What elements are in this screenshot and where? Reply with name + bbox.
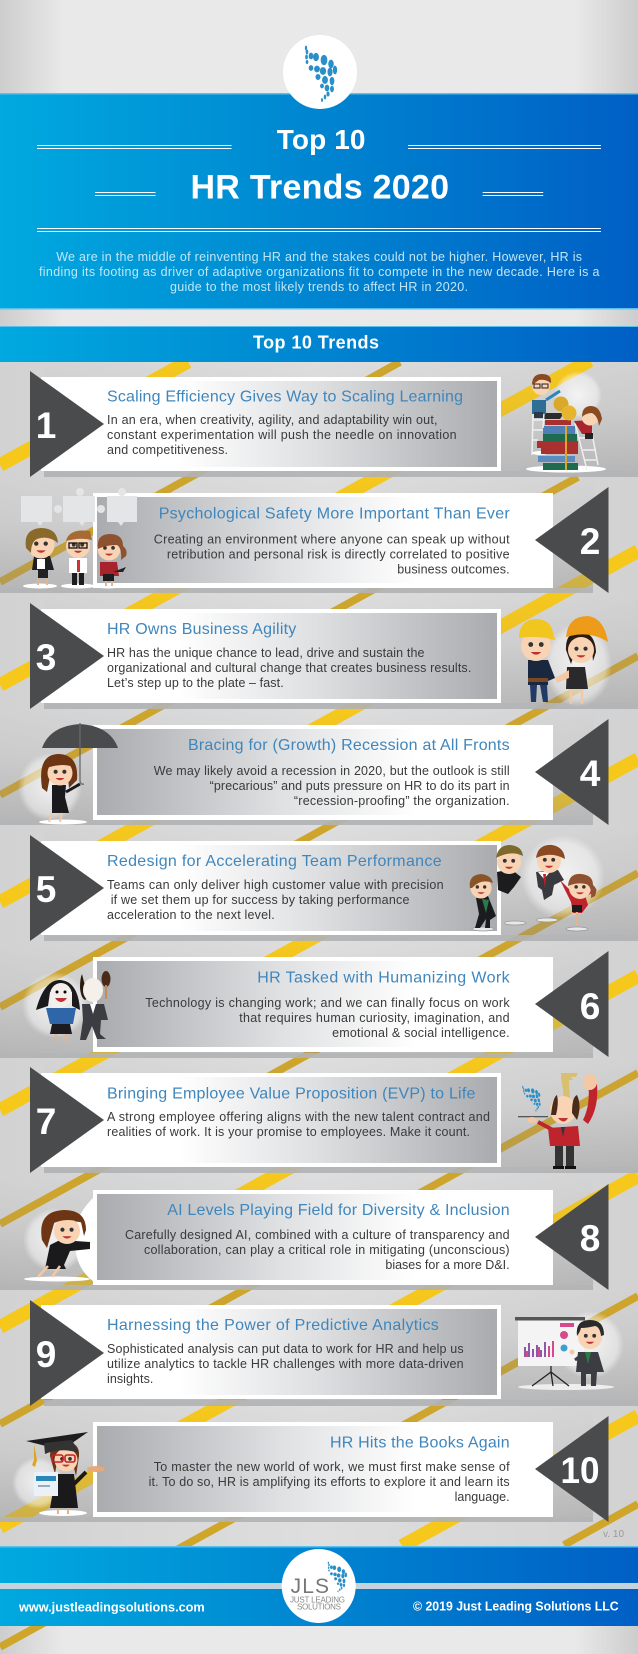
panel: trend 9: Harnessing the Power of Predictive Analytics bbox=[107, 1317, 439, 1334]
panel: trend 4 bbox=[93, 719, 608, 825]
panel: trend 10: To master the new world of work, we must first make sense of bbox=[154, 1460, 510, 1474]
panel: trend 5: Redesign for Accelerating Team Performance bbox=[107, 853, 442, 870]
panel: trend 10 bbox=[93, 1416, 608, 1522]
title bbox=[190, 124, 449, 206]
diagonal yellow stripes bbox=[0, 360, 638, 1647]
panel: trend 9: insights. bbox=[107, 1372, 153, 1386]
icon: two people with masks bbox=[22, 971, 110, 1042]
panel: trend 7: Bringing Employee Value Proposition (EVP) to Life bbox=[107, 1085, 475, 1102]
panel: trend 4: 4 bbox=[580, 753, 601, 794]
panel: trend 1: Scaling Efficiency Gives Way to Scaling Learning bbox=[107, 389, 463, 406]
panel: trend 2 bbox=[93, 487, 608, 593]
bottom grey strip bbox=[0, 1626, 638, 1654]
panel: trend 6: 6 bbox=[580, 986, 600, 1027]
panel: trend 9 bbox=[30, 1300, 501, 1406]
panel: trend 3: Let’s step up to the plate – fast. bbox=[107, 676, 284, 690]
footer band bbox=[0, 1546, 638, 1626]
icon: puzzle pieces and team bbox=[21, 488, 137, 588]
panel: trend 7: 7 bbox=[36, 1101, 56, 1142]
footer JLS logo: SOLUTIONS bbox=[297, 1602, 341, 1612]
panel: trend 8: AI Levels Playing Field for Diversity & Inclusion bbox=[167, 1202, 510, 1219]
panel: trend 4: Bracing for (Growth) Recession at All Fronts bbox=[188, 737, 510, 754]
top grey strip bbox=[0, 0, 638, 93]
panel: trend 6: Technology is changing work; and we can finally focus on work bbox=[145, 996, 510, 1010]
panel: trend 5: if we set them up for success by taking performance bbox=[111, 893, 409, 907]
panel: trend 3: 3 bbox=[36, 637, 56, 678]
panel: trend 5: acceleration to the next level. bbox=[107, 908, 275, 922]
panel: trend 2: Creating an environment where anyone can speak up without bbox=[154, 532, 510, 546]
row background bands bbox=[0, 362, 638, 1522]
panel: trend 2: 2 bbox=[580, 521, 600, 562]
panel: trend 5: 5 bbox=[36, 869, 56, 910]
panel: trend 1: and competitiveness. bbox=[107, 443, 228, 457]
panel: trend 8: collaboration, can play a critical role in mitigating (unconscious) bbox=[144, 1243, 510, 1257]
panel: trend 7: realities of work. It is your promise to employees. Make it count. bbox=[107, 1125, 470, 1139]
section heading band: Top 10 Trends bbox=[253, 332, 379, 352]
panel: trend 10: HR Hits the Books Again bbox=[330, 1434, 510, 1451]
panel: trend 8 bbox=[93, 1184, 608, 1290]
panel: trend 5 bbox=[30, 835, 501, 941]
footer JLS logo: JUST LEADING bbox=[290, 1596, 345, 1605]
panel: trend 3: HR Owns Business Agility bbox=[107, 621, 296, 638]
panel: trend 3: organizational and cultural change that creates business results. bbox=[107, 661, 471, 675]
panel: trend 2: Psychological Safety More Important Than Ever bbox=[159, 505, 510, 522]
panel: trend 10: language. bbox=[455, 1490, 510, 1504]
intro paragraph: We are in the middle of reinventing HR and the stakes could not be higher. However, HR is bbox=[56, 250, 582, 264]
panel: trend 6: emotional & social intelligence. bbox=[332, 1026, 510, 1040]
grey gap strip bbox=[0, 309, 638, 326]
footer copyright: © 2019 Just Leading Solutions LLC bbox=[413, 1599, 619, 1614]
panel: trend 4: We may likely avoid a recession in 2020, but the outlook is still bbox=[154, 764, 510, 778]
title: HR Trends 2020 bbox=[190, 168, 449, 206]
footer JLS logo: JLS bbox=[291, 1575, 329, 1598]
decorative rule lines bbox=[37, 145, 601, 232]
panel: trend 1: constant experimentation will push the needle on innovation bbox=[107, 428, 457, 442]
icon: woman with umbrella bbox=[18, 723, 118, 824]
panel: trend 1: 1 bbox=[36, 405, 56, 446]
intro paragraph: finding its footing as driver of adaptive organizations fit to compete in the new decade. Here is a bbox=[39, 265, 600, 279]
intro paragraph bbox=[39, 250, 600, 294]
header band bbox=[0, 93, 638, 310]
panel: trend 4: “precarious” and puts pressure on HR to do its part in bbox=[210, 779, 510, 793]
panel: trend 9: utilize analytics to tackle HR challenges with more data-driven bbox=[107, 1357, 464, 1371]
title: Top 10 bbox=[277, 124, 366, 155]
logo circle bbox=[283, 35, 357, 109]
panel: trend 3 bbox=[30, 603, 501, 709]
footer JLS logo bbox=[282, 1549, 356, 1623]
panel: trend 2: business outcomes. bbox=[397, 562, 510, 576]
version label: v. 10 bbox=[603, 1529, 624, 1540]
panel: trend 10: 10 bbox=[560, 1450, 600, 1491]
icon: woman pushing panel bbox=[23, 1194, 97, 1284]
panel: trend 8: 8 bbox=[580, 1218, 600, 1259]
panel: trend 3: HR has the unique chance to lead, drive and sustain the bbox=[107, 646, 425, 660]
panel: trend 10: it. To do so, HR is amplifying its efforts to explore it and learn its bbox=[149, 1475, 510, 1489]
panel: trend 6 bbox=[93, 951, 608, 1057]
panel: trend 5: Teams can only deliver high customer value with precision bbox=[107, 878, 444, 892]
panel: trend 9: 9 bbox=[36, 1334, 56, 1375]
panel: trend 8: biases for a more D&I. bbox=[385, 1258, 510, 1272]
panel: trend 1: In an era, when creativity, agility, and adaptability win out, bbox=[107, 413, 438, 427]
intro paragraph: guide to the most likely trends to affect HR in 2020. bbox=[170, 280, 468, 294]
panel: trend 1 bbox=[30, 371, 501, 477]
panel: trend 7: A strong employee offering aligns with the new talent contract and bbox=[107, 1110, 490, 1124]
icon: jumping team bbox=[470, 835, 605, 931]
panel: trend 2: retribution and personal risk is directly correlated to positive bbox=[167, 547, 510, 561]
panel: trend 6: HR Tasked with Humanizing Work bbox=[257, 969, 511, 986]
panel: trend 6: that requires human curiosity, imagination, and bbox=[239, 1011, 510, 1025]
icon: handshake with hard hats bbox=[519, 616, 612, 707]
panel: trend 4: “recession-proofing” the organization. bbox=[294, 794, 510, 808]
panel: trend 8: Carefully designed AI, combined with a culture of transparency and bbox=[125, 1228, 510, 1242]
section heading band bbox=[0, 326, 638, 362]
icon: man presenting chart bbox=[515, 1311, 624, 1390]
panel: trend 9: Sophisticated analysis can put data to work for HR and help us bbox=[107, 1342, 464, 1356]
icon: man holding logo on tray bbox=[518, 1073, 597, 1169]
footer website: www.justleadingsolutions.com bbox=[18, 1600, 205, 1615]
icon: graduate with diploma bbox=[12, 1432, 105, 1516]
icon: people on stack of books bbox=[526, 371, 606, 472]
panel: trend 7 bbox=[30, 1067, 501, 1173]
